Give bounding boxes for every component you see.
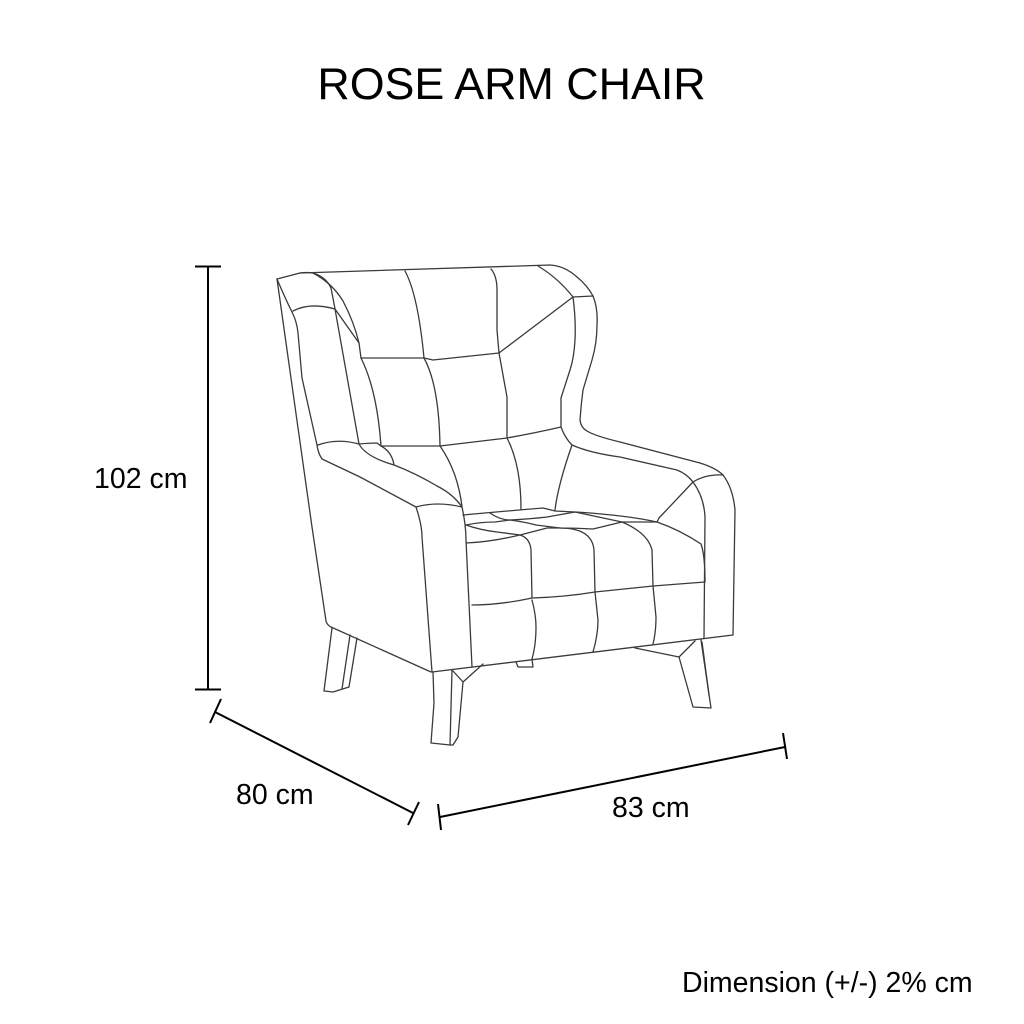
width dimension line <box>438 733 787 830</box>
right leg <box>635 640 711 708</box>
centre foot <box>516 659 533 667</box>
seat cushion seams <box>463 508 705 659</box>
rear left leg <box>324 628 357 692</box>
left arm top <box>318 441 462 507</box>
title: ROSE ARM CHAIR <box>317 59 706 109</box>
illustration: arm chair line drawing <box>277 265 735 745</box>
height dimension line <box>195 266 221 690</box>
depth dimension line <box>210 699 419 825</box>
tolerance note: Dimension (+/-) 2% cm <box>682 967 973 999</box>
chair right wing <box>561 296 735 638</box>
chair left wing and side panel <box>277 272 431 672</box>
height label: 102 cm <box>94 463 187 495</box>
width label: 83 cm <box>612 792 690 824</box>
chair base rail <box>432 635 733 672</box>
chair top edge and wing roll <box>300 265 593 358</box>
back tufting seams <box>361 269 573 510</box>
depth label: 80 cm <box>236 779 314 811</box>
front left leg <box>431 664 483 745</box>
front arm panel <box>416 507 472 672</box>
